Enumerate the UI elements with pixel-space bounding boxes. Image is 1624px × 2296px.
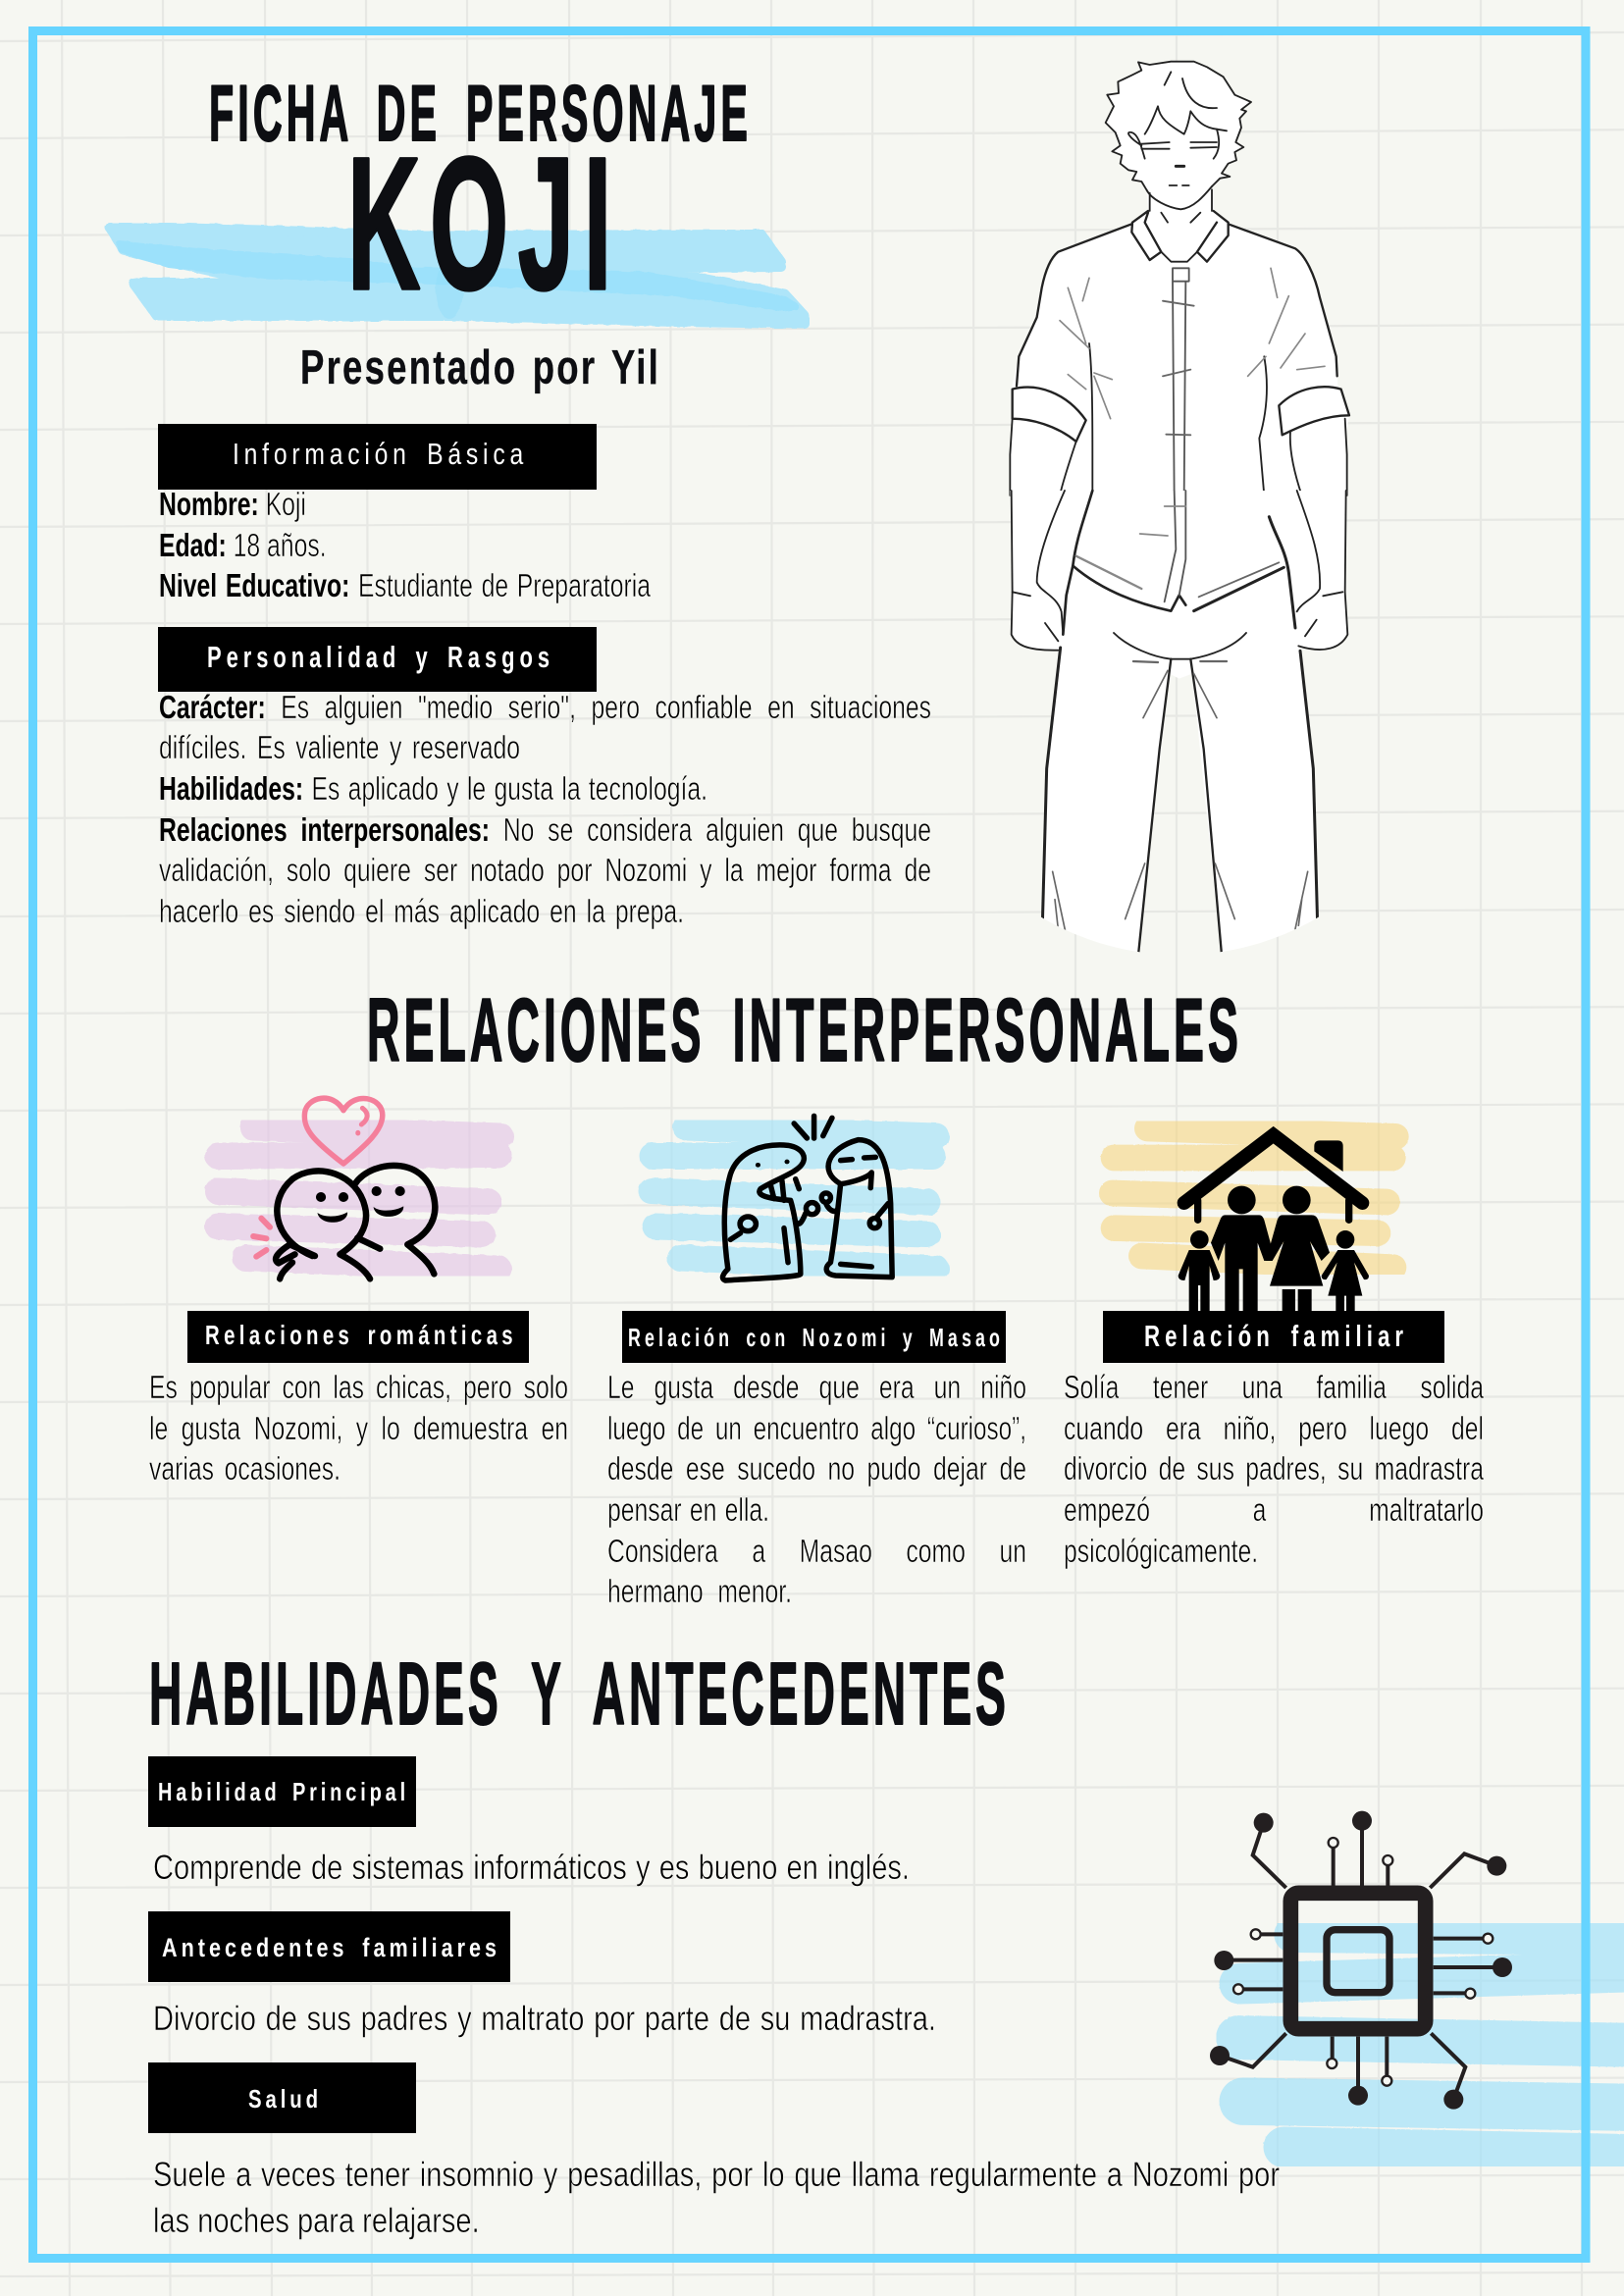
text: main ability: Comprende de sistemas informáticos y es bueno en inglés. xyxy=(153,1849,910,1887)
text block: personality and traits: Habilidades: Es aplicado y le gusta la tecnología. xyxy=(159,770,707,807)
icon: Nozomi and Masao xyxy=(652,1116,936,1280)
pink brush xyxy=(218,1127,500,1269)
text: health: las noches para relajarse. xyxy=(153,2202,480,2240)
subtitle: author: Presentado por Yil xyxy=(300,341,660,394)
text block: relationship with Nozomi and Masao xyxy=(607,1369,1026,1609)
icon: family under house xyxy=(1112,1128,1395,1312)
label: relación con Nozomi y Masao: Relación con Nozomi y Masao xyxy=(628,1323,1004,1352)
text block: personality and traits: hacerlo es siendo el más aplicado en la prepa. xyxy=(159,893,684,929)
text block: family relationship: cuando era niño, pero luego del xyxy=(1064,1410,1484,1446)
text block: relationship with Nozomi and Masao: Le gusta desde que era un niño xyxy=(607,1369,1026,1405)
heading: character name: KOJI xyxy=(347,118,621,329)
text block: basic information: Nivel Educativo: Estudiante de Preparatoria xyxy=(159,567,651,603)
text block: romantic relationships: Es popular con las chicas, pero solo xyxy=(149,1369,568,1405)
two figures xyxy=(722,1116,892,1280)
label: habilidad principal xyxy=(148,1756,416,1827)
label: habilidad principal: Habilidad Principal xyxy=(158,1777,409,1806)
chip brush xyxy=(1238,1935,1624,2156)
text block: personality and traits xyxy=(159,689,931,929)
text block: personality and traits: difíciles. Es valiente y reservado xyxy=(159,729,520,765)
text block: romantic relationships: le gusta Nozomi, y lo demuestra en xyxy=(149,1410,568,1446)
label: antecedentes familiares: Antecedentes familiares xyxy=(162,1933,500,1962)
label: salud: Salud xyxy=(248,2084,322,2113)
text: family background: Divorcio de sus padres y maltrato por parte de su madrastra. xyxy=(153,2000,936,2038)
text block: basic information xyxy=(159,486,651,603)
label: información básica: Información Básica xyxy=(233,437,528,471)
text block: family relationship: empezó a maltratarlo xyxy=(1064,1491,1484,1528)
label: salud xyxy=(148,2062,416,2133)
text: health: Suele a veces tener insomnio y pesadillas, por lo que llama regularmente a Nozomi por xyxy=(153,2156,1280,2194)
icon: romantic couple xyxy=(218,1098,500,1278)
couple drawing xyxy=(253,1098,435,1278)
family figures xyxy=(1179,1186,1369,1312)
label: relación familiar xyxy=(1103,1311,1444,1363)
text block: basic information: Nombre: Koji xyxy=(159,486,306,522)
text block: family relationship: divorcio de sus padres, su madrastra xyxy=(1064,1450,1484,1487)
heading: ficha de personaje: FICHA DE PERSONAJE xyxy=(209,70,752,158)
text block: relationship with Nozomi and Masao: hermano menor. xyxy=(607,1573,792,1609)
house roof xyxy=(1184,1135,1362,1220)
brush stroke behind name xyxy=(110,228,805,324)
character illustration: Koji xyxy=(1010,62,1349,959)
label: relaciones románticas xyxy=(187,1311,529,1363)
text block: romantic relationships xyxy=(149,1369,568,1487)
label: personalidad y rasgos: Personalidad y Rasgos xyxy=(207,640,554,674)
text block: personality and traits: Carácter: Es alguien "medio serio", pero confiable en situaciones xyxy=(159,689,931,725)
label: relaciones románticas: Relaciones románticas xyxy=(205,1320,517,1350)
icon: microchip with brush xyxy=(1210,1811,1624,2156)
text block: relationship with Nozomi and Masao: desde ese sucedo no pudo dejar de xyxy=(607,1450,1026,1487)
text: health xyxy=(153,2156,1280,2240)
text block: personality and traits: Relaciones interpersonales: No se considera alguien que busque xyxy=(159,811,931,848)
yellow brush xyxy=(1112,1128,1395,1268)
text block: basic information: Edad: 18 años. xyxy=(159,527,327,563)
text block: romantic relationships: varias ocasiones. xyxy=(149,1450,341,1487)
text block: relationship with Nozomi and Masao: pensar en ella. xyxy=(607,1491,769,1528)
text block: family relationship: psicológicamente. xyxy=(1064,1533,1258,1569)
text block: family relationship: Solía tener una familia solida xyxy=(1064,1369,1484,1405)
text block: family relationship xyxy=(1064,1369,1484,1569)
text block: personality and traits: validación, solo quiere ser notado por Nozomi y la mejor forma de xyxy=(159,852,931,888)
chip body xyxy=(1210,1811,1512,2110)
text block: relationship with Nozomi and Masao: luego de un encuentro algo “curioso”, xyxy=(607,1410,1026,1446)
label: antecedentes familiares xyxy=(148,1911,510,1982)
label: información básica xyxy=(158,424,597,490)
label: personalidad y rasgos xyxy=(158,627,597,692)
label: relación con Nozomi y Masao xyxy=(622,1311,1006,1363)
text block: relationship with Nozomi and Masao: Considera a Masao como un xyxy=(607,1533,1026,1569)
blue brush xyxy=(652,1127,936,1269)
label: relación familiar: Relación familiar xyxy=(1144,1319,1408,1353)
